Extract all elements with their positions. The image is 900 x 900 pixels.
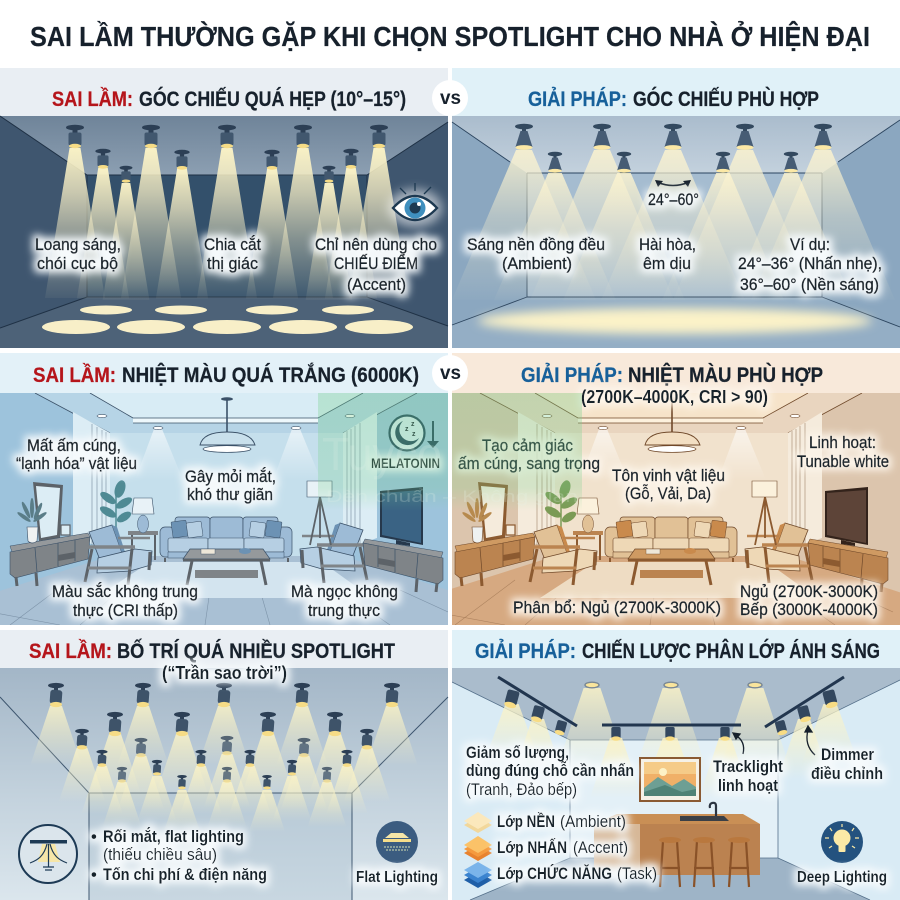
text: problems list: • [91,866,97,884]
kitchen room [452,668,900,900]
panel header: SAI LẦM: [29,638,112,663]
caption: eye strain: khó thư giãn [187,485,273,504]
caption: accent only: CHIẾU ĐIỂM [334,254,418,273]
panel header: GÓC CHIẾU PHÙ HỢP [633,86,819,111]
panel header: GIẢI PHÁP: [528,86,627,111]
icon: flat beam circle [19,825,77,883]
watermark [318,393,582,511]
icon: deep lighting bulb [821,821,863,863]
caption: false gem colours: Mà ngọc không [291,582,398,601]
text: problems list: • [91,828,97,846]
narrow light beams [45,148,409,300]
label: flat lighting: Flat Lighting [356,869,438,886]
right track rail [765,677,844,736]
panel: colour temperature mistake [0,353,460,633]
arrow: beam angle [655,180,691,187]
cold living room [0,393,460,633]
text: fewer lights: (Tranh, Đảo bếp) [466,781,577,799]
label: dimmer: điều chỉnh [811,765,883,783]
ceiling beams [483,688,859,804]
label: melatonin: MELATONIN [371,456,440,471]
icon: eye [388,183,442,227]
caption: honour materials: (Gỗ, Vải, Da) [625,484,711,503]
subtitle: recommended range: (2700K–4000K, CRI > 90) [581,387,768,407]
panel header [452,68,900,116]
caption: tunable white: Linh hoạt: [809,433,876,452]
warm living room [435,393,900,633]
legend: ambient layer: (Ambient) [560,813,626,831]
panel header [0,353,448,393]
many spotlight fixtures [48,683,400,789]
panel header: SAI LẦM: [52,86,133,111]
panel: layered lighting solution [452,630,900,900]
left track rail [498,677,577,736]
caption: room temperatures [740,582,878,619]
legend: accent layer: (Accent) [573,839,628,857]
caption: low CRI [52,582,198,620]
caption: harmony [639,235,696,273]
bright room [452,116,900,348]
caption: uneven glare: Loang sáng, [35,235,121,254]
caption: harmony: Hài hòa, [639,235,696,254]
text: fewer lights: dùng đúng chỗ cần nhấn [466,761,634,780]
kitchen island [594,803,760,875]
caption: visual split: Chia cắt [204,235,261,254]
panel header: NHIỆT MÀU QUÁ TRẮNG (6000K) [122,362,419,387]
panel header: GÓC CHIẾU QUÁ HẸP (10°–15°) [139,86,406,111]
panel header: NHIỆT MÀU PHÙ HỢP [628,362,823,387]
icon: melatonin drop: z [405,426,409,433]
arrow: tracklight [733,733,744,754]
label: tracklight: Tracklight [713,758,783,776]
panel header [452,353,900,393]
caption: accent only [315,235,437,294]
starry ceiling beams [30,706,418,832]
caption: tunable white: Tunable white [797,452,889,471]
text: problems list [91,827,267,884]
vs badge row 1: vs [440,88,461,109]
icon: melatonin drop: z [412,431,416,438]
caption: cosy [458,436,600,473]
caption: room temperatures: Bếp (3000K-4000K) [740,600,878,619]
vs badge row 2 [432,355,468,391]
caption: uneven glare [35,235,121,273]
label: beam angle: 24°–60° [648,190,699,209]
caption: honour materials: Tôn vinh vật liệu [612,466,725,485]
text: problems list: Rối mắt, flat lighting [103,827,244,846]
floor light pools [42,306,413,334]
caption: cold materials [16,436,137,473]
artwork [639,757,701,802]
centre track rail [602,725,741,741]
panel header: GIẢI PHÁP: [521,362,623,387]
recessed downlights [585,682,762,688]
label: dimmer: Dimmer [821,746,874,764]
wide light beams [452,150,895,300]
caption: cold materials: Mất ấm cúng, [27,436,121,455]
caption: low CRI: Màu sắc không trung [52,582,198,601]
panel header: SAI LẦM: [33,362,116,387]
caption: accent only: Chỉ nên dùng cho [315,235,437,254]
watermark: Tuyco [322,428,442,480]
vs badge row 1 [432,80,468,116]
label: tracklight: linh hoạt [718,777,778,795]
caption: example angles: Ví dụ: [790,235,830,254]
panel: too many spotlights [0,630,448,900]
watermark: Đèn chuẩn – Không gian [326,487,578,506]
legend: accent layer [464,836,628,861]
text: fewer lights: Giảm số lượng, [466,744,569,762]
caption: cold materials: “lạnh hóa” vật liệu [16,454,137,473]
caption: uneven glare: chói cục bộ [37,254,118,273]
panel: narrow beam mistake [0,68,448,348]
subtitle: starry ceiling: (“Trần sao trời”) [162,663,287,683]
wide-beam fixtures [515,124,832,173]
caption: eye strain: Gây mỏi mắt, [185,467,276,486]
legend: task layer [464,862,657,888]
caption: even ambient: Sáng nền đồng đều [467,235,605,254]
caption: cosy: ấm cúng, sang trọng [458,454,600,473]
arrow: dimmer [805,726,815,755]
caption: distribution: Phân bổ: Ngủ (2700K-3000K) [513,598,721,617]
panel header: GIẢI PHÁP: [475,638,576,663]
caption: example angles: 24°–36° (Nhấn nhẹ), [738,254,882,273]
caption: low CRI: thực (CRI thấp) [73,601,178,620]
legend: accent layer: Lớp NHẤN [497,838,567,857]
caption: example angles: 36°–60° (Nền sáng) [740,275,879,294]
text: problems list: (thiếu chiều sâu) [103,846,217,864]
panel header: BỐ TRÍ QUÁ NHIỀU SPOTLIGHT [117,637,395,663]
bar stools [659,837,750,887]
panel header [452,630,900,668]
caption: accent only: (Accent) [347,275,406,294]
icon: melatonin drop: z [411,421,415,428]
caption: visual split: thị giác [207,254,258,273]
icon: flat lighting [376,821,418,863]
dark room [0,116,448,348]
caption: example angles [738,235,882,294]
text: problems list: Tốn chi phí & điện năng [103,866,267,884]
caption: eye strain [185,467,276,504]
vs badge row 2: vs [440,363,461,384]
legend: task layer: (Task) [617,865,657,883]
label: dimmer [811,746,883,783]
caption: even ambient [467,235,605,273]
icon: melatonin drop [390,416,439,450]
caption: harmony: êm dịu [643,254,691,273]
caption: honour materials [612,466,725,503]
legend: ambient layer: Lớp NỀN [497,812,555,831]
panel header [0,630,448,668]
panel: suitable beam solution [452,68,900,348]
caption: room temperatures: Ngủ (2700K-3000K) [740,582,878,601]
caption: even ambient: (Ambient) [502,254,572,273]
text: fewer lights [466,744,634,799]
caption: visual split [204,235,261,273]
caption: tunable white [797,433,889,471]
panel: colour temperature solution [435,353,900,633]
label: tracklight [713,758,783,795]
spotlight fixtures [66,125,388,183]
soft floor glow [478,308,872,334]
caption: cosy: Tạo cảm giác [482,436,573,455]
caption: false gem colours: trung thực [308,601,380,620]
caption: false gem colours [291,582,398,620]
ceiling room [0,668,448,900]
legend: task layer: Lớp CHỨC NĂNG [497,864,612,883]
panel header [0,68,448,116]
legend: ambient layer [464,812,626,833]
